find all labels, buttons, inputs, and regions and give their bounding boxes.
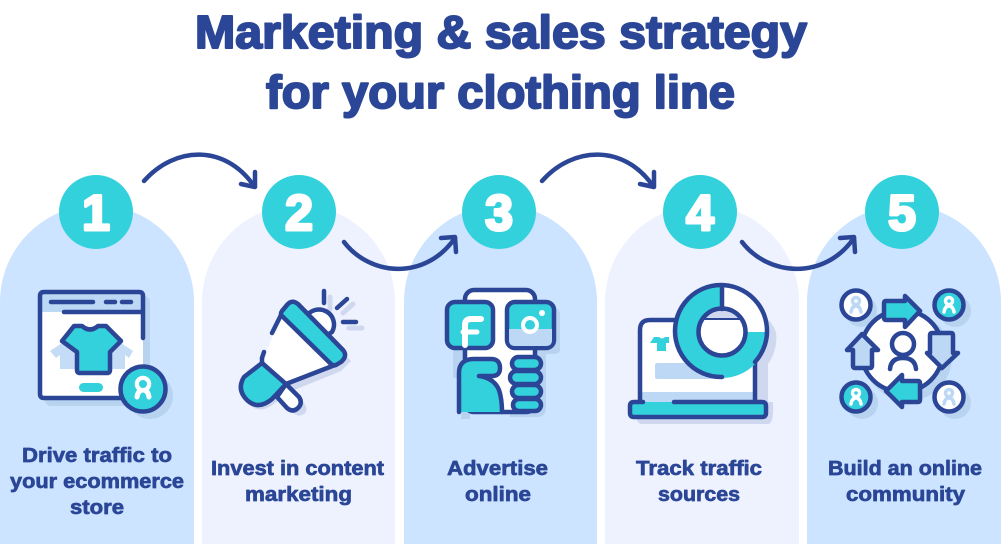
arrow: step 1 to 2: [144, 155, 255, 187]
number badge 1: [59, 175, 133, 249]
label: step 5: [828, 458, 982, 506]
label: step 2: Invest in content: [211, 458, 384, 480]
label: step 1: [10, 445, 184, 519]
icon: web store with t-shirt: [40, 292, 173, 419]
panel: step 4: [605, 205, 799, 544]
arrow: step 4 to 5: [742, 237, 855, 269]
label: step 1: Drive traffic to: [22, 445, 172, 467]
label: step 1: your ecommerce: [10, 471, 184, 493]
label: step 3: [447, 458, 548, 506]
number badge 5: 5: [888, 185, 916, 241]
label: step 2: marketing: [245, 484, 352, 506]
number badge 3: [462, 175, 536, 249]
number badge 5: [865, 175, 939, 249]
panel: step 3: [404, 205, 597, 544]
label: step 4: Track traffic: [636, 458, 762, 480]
icon: community network: [842, 290, 971, 419]
number badge 2: 2: [285, 185, 313, 241]
arrow: step 2 to 3: [344, 237, 456, 269]
label: step 5: Build an online: [828, 458, 982, 480]
number badge 4: 4: [686, 185, 714, 241]
number badge 4: [663, 175, 737, 249]
label: step 4: [636, 458, 762, 506]
icon: social media on phone in hand: [447, 290, 560, 419]
label: step 3: online: [465, 484, 531, 506]
panel: step 5: [807, 205, 1001, 544]
label: step 5: community: [846, 484, 966, 506]
label: step 1: store: [70, 497, 124, 519]
icon: megaphone: [241, 291, 362, 416]
title: for your clothing line: [266, 66, 735, 118]
panel: step 1: [0, 205, 194, 544]
number badge 1: 1: [82, 185, 110, 241]
label: step 4: sources: [658, 484, 740, 506]
title: [195, 6, 807, 118]
title: Marketing & sales strategy: [195, 6, 807, 58]
arrow: step 3 to 4: [542, 155, 654, 187]
label: step 3: Advertise: [447, 458, 548, 480]
icon: laptop with donut chart: [630, 285, 776, 424]
number badge 3: 3: [485, 185, 513, 241]
number badge 2: [262, 175, 336, 249]
label: step 2: [211, 458, 384, 506]
panel: step 2: [202, 205, 395, 544]
